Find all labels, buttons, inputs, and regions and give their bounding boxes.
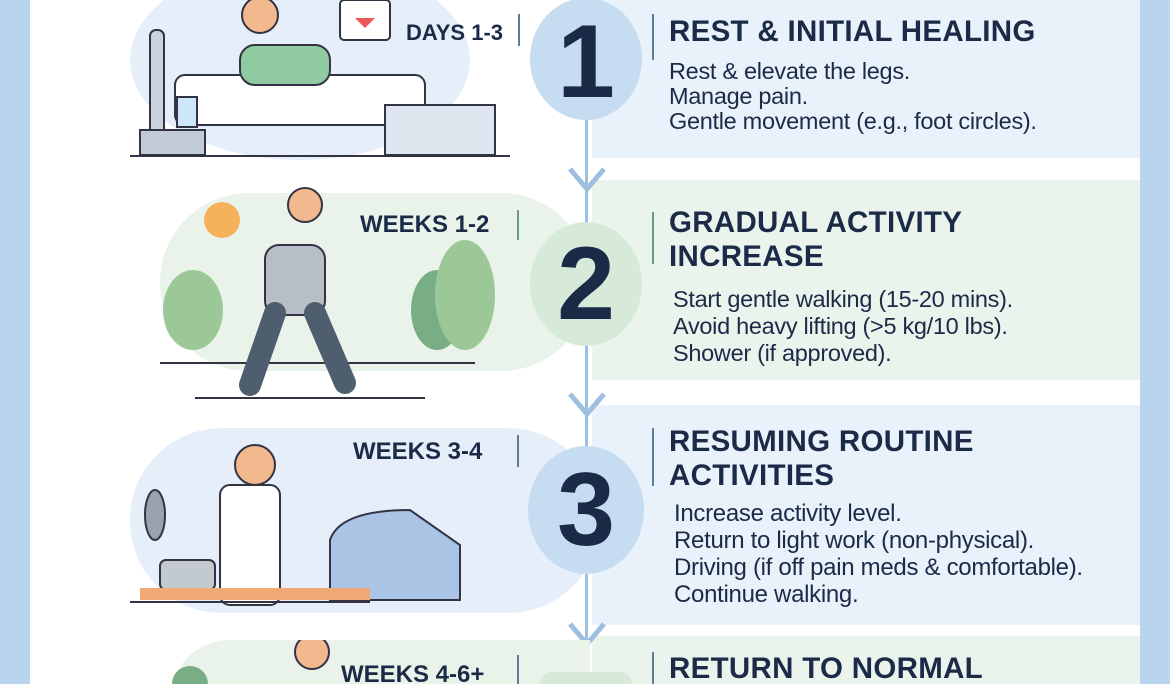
heading 2: INCREASE — [669, 240, 824, 273]
text 2: Avoid heavy lifting (>5 kg/10 lbs). — [673, 313, 1008, 339]
label: weeks 1-2: WEEKS 1-2 — [360, 211, 489, 238]
text 2: Start gentle walking (15-20 mins). — [673, 286, 1013, 312]
illustration: walking — [160, 187, 569, 399]
panel: row 4 right — [592, 636, 1140, 684]
illustration: bed — [130, 0, 510, 160]
circle 3 — [528, 446, 644, 574]
text 2: Shower (if approved). — [673, 340, 891, 366]
text 3 — [674, 500, 1083, 608]
timeline line — [585, 0, 588, 684]
text 1: Gentle movement (e.g., foot circles). — [669, 108, 1037, 134]
illustration: row 4 — [172, 640, 590, 684]
illustration: cooking & driving — [130, 428, 583, 613]
circle 4 — [540, 672, 632, 684]
label: days 1-3: DAYS 1-3 — [406, 20, 503, 45]
panel: row 2 right — [592, 180, 1140, 380]
heading 2: GRADUAL ACTIVITY — [669, 206, 962, 239]
circle 3: 3 — [557, 452, 615, 568]
text 2 — [673, 286, 1013, 366]
panel: row 1 right — [592, 0, 1140, 158]
text 3: Return to light work (non-physical). — [674, 527, 1034, 554]
arrow 2 — [568, 392, 606, 416]
text 1 — [669, 58, 1037, 134]
circle 1: 1 — [557, 4, 615, 120]
heading 3 — [669, 425, 974, 492]
arrow 1 — [568, 168, 606, 192]
heading 3: ACTIVITIES — [669, 459, 834, 492]
text 3: Continue walking. — [674, 581, 858, 608]
heading 1: REST & INITIAL HEALING — [669, 15, 1036, 48]
panel: row 3 right — [592, 405, 1140, 625]
text 3: Driving (if off pain meds & comfortable). — [674, 554, 1083, 581]
circle 2 — [530, 222, 642, 346]
arrow 3 — [568, 622, 606, 644]
text 1: Manage pain. — [669, 83, 808, 109]
heading 3: RESUMING ROUTINE — [669, 425, 974, 458]
heading 2 — [669, 206, 962, 273]
label: weeks 3-4: WEEKS 3-4 — [353, 438, 482, 465]
circle 1 — [530, 0, 642, 120]
text 3: Increase activity level. — [674, 500, 902, 527]
text 1: Rest & elevate the legs. — [669, 58, 910, 84]
circle 2: 2 — [557, 226, 615, 342]
